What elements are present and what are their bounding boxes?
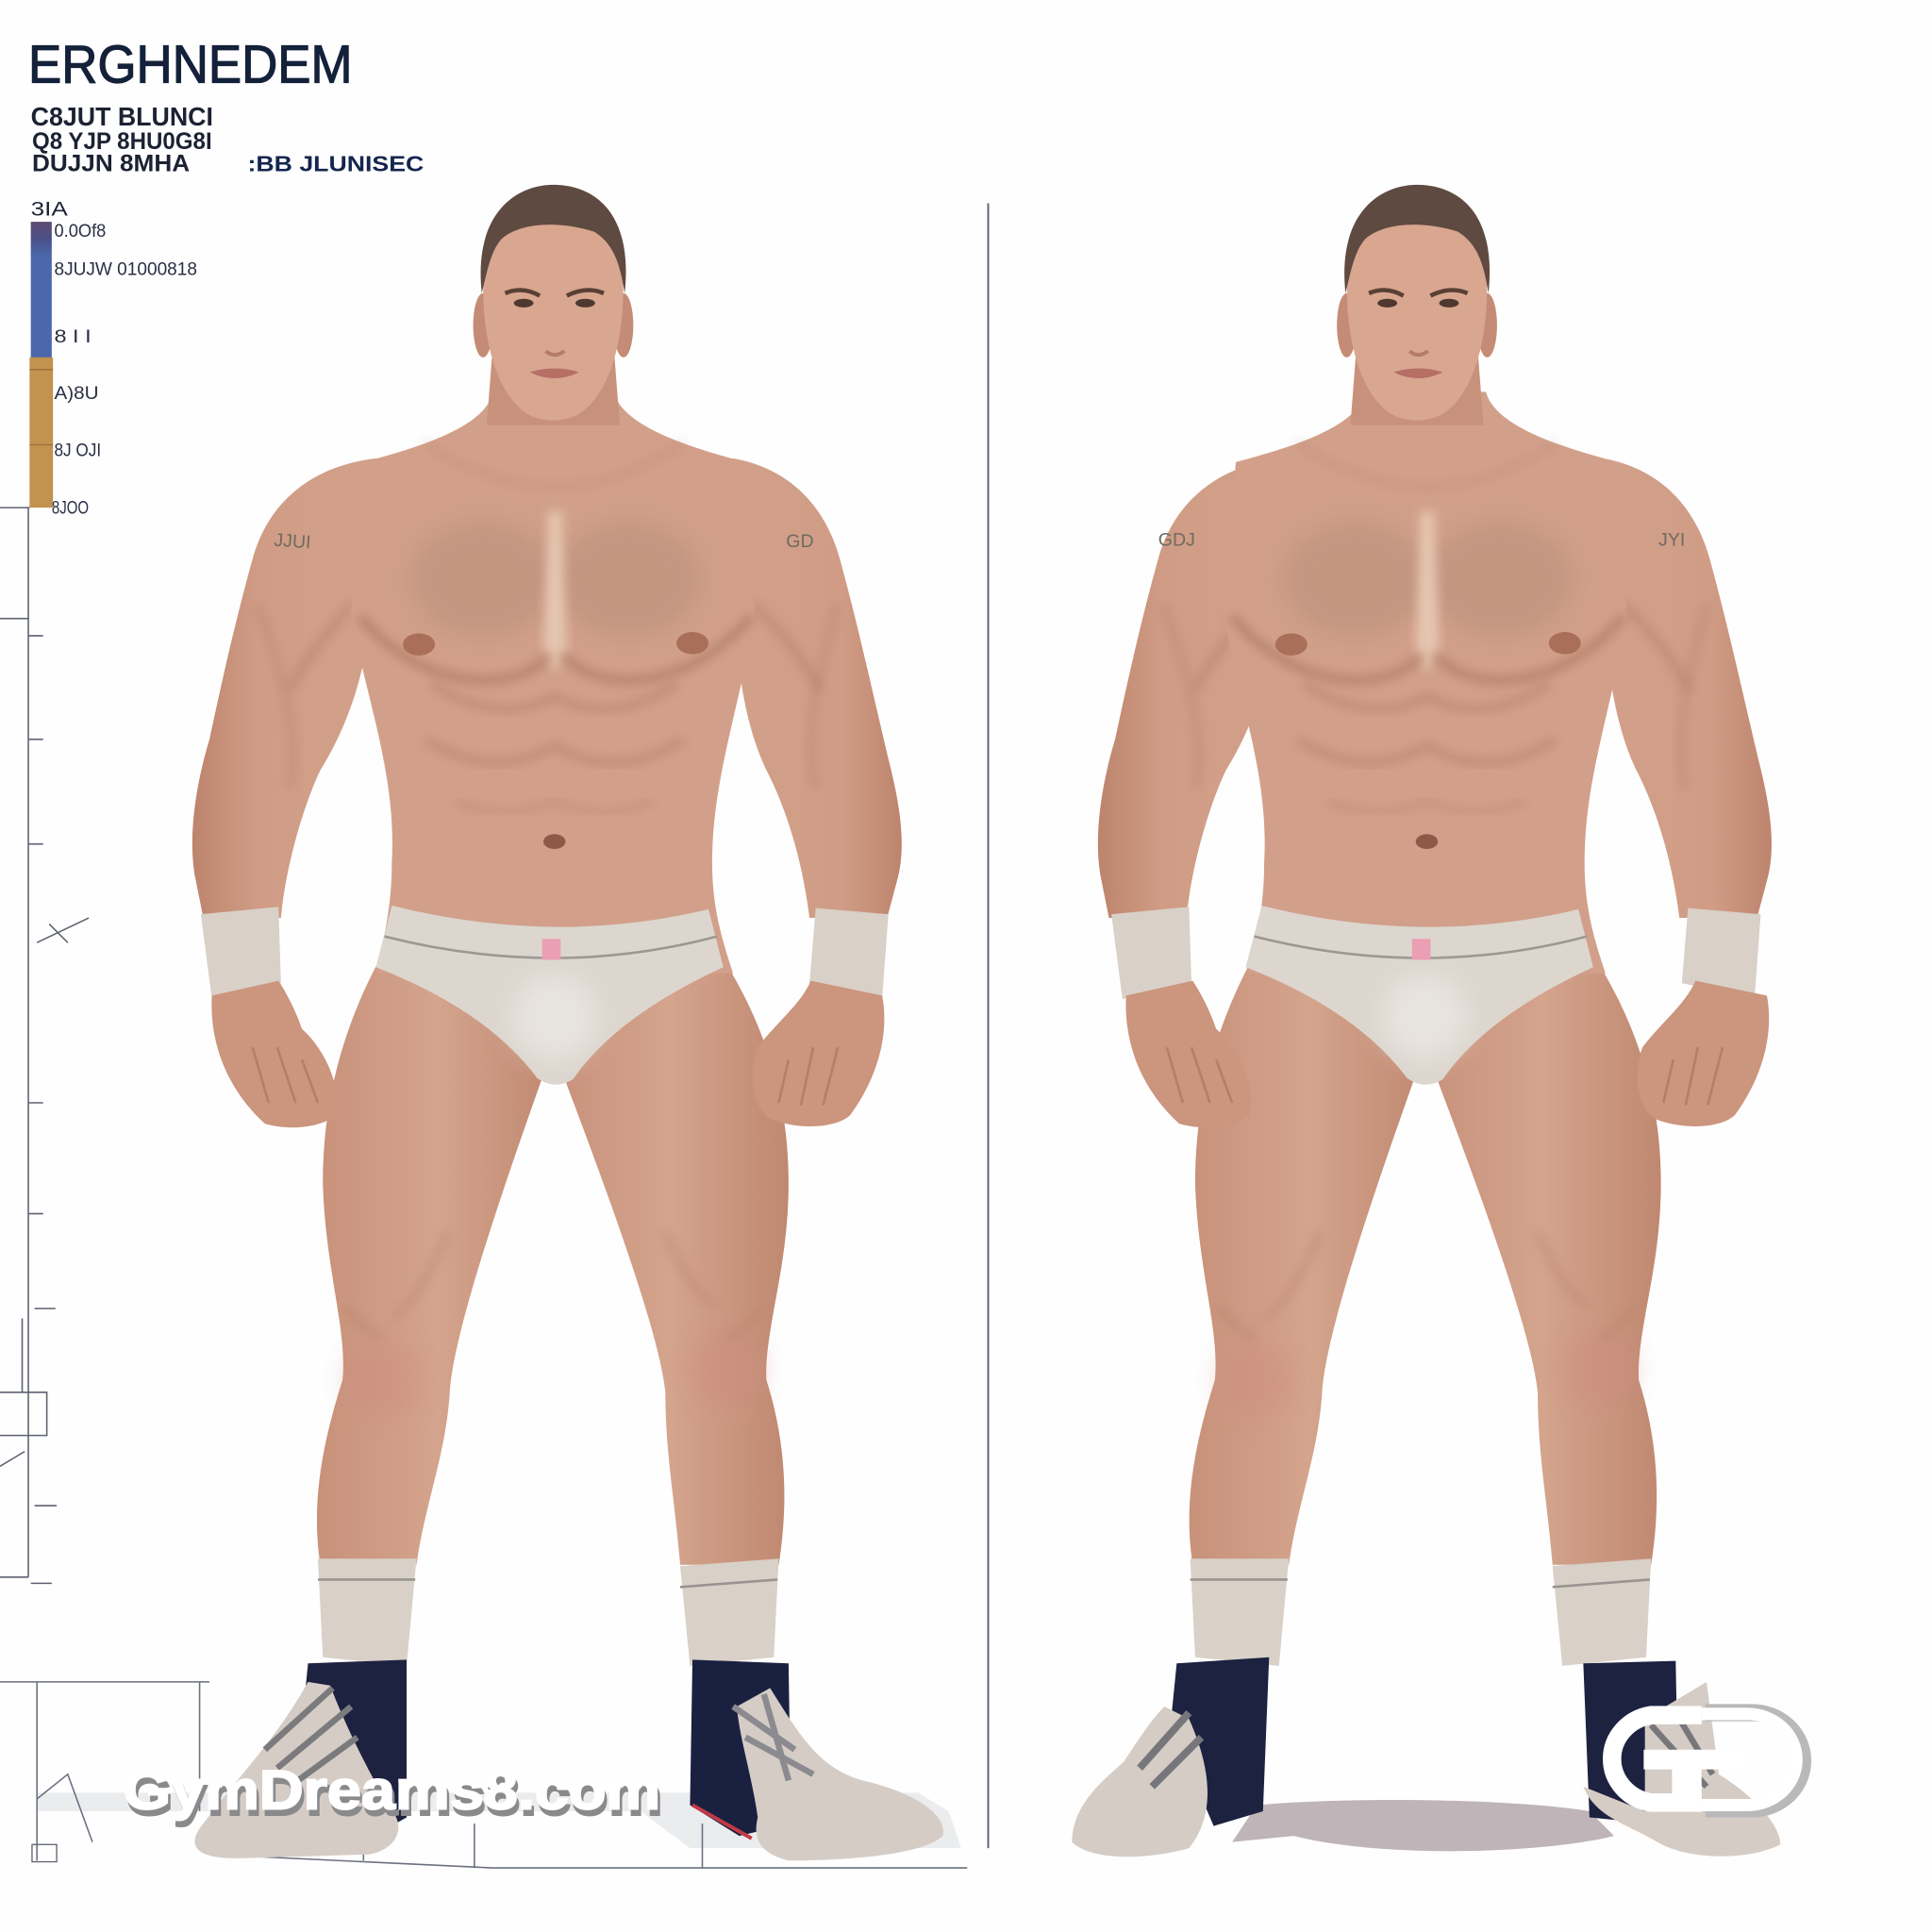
tattoos: GD [786, 531, 814, 552]
colour scale legend: 8JUJW 01000818 [54, 258, 197, 279]
watermark: GymDreams8.com [124, 1759, 660, 1821]
hand right [753, 981, 884, 1126]
legs [317, 955, 789, 1565]
boot right [1583, 1661, 1780, 1857]
divider line [988, 204, 990, 1848]
head [474, 185, 633, 425]
torso [1224, 391, 1626, 974]
colour scale legend: 0.0Of8 [54, 221, 106, 242]
figure right: front view [1072, 185, 1780, 1857]
colour scale legend: 3IA [31, 199, 68, 221]
subtitle text block [31, 102, 424, 177]
shorts [1245, 906, 1593, 1085]
left measurement axis [0, 508, 89, 1583]
ground shadow [1232, 1800, 1614, 1851]
wrist band right [809, 908, 889, 998]
foot measurement diagram and platform [0, 1682, 967, 1868]
wrist band left [201, 907, 281, 999]
hand left [211, 981, 337, 1127]
arm right [1603, 458, 1772, 918]
hand right [1637, 981, 1769, 1126]
tattoos: JJUI [274, 530, 311, 553]
subtitle text block: DUJJN 8MHA [32, 152, 190, 177]
subtitle text block: :BB JLUNISEC [248, 152, 424, 176]
tattoos: JYI [1658, 530, 1685, 551]
arm right [733, 458, 902, 918]
watermark: GymDreams8.com [125, 1766, 663, 1827]
boot right [690, 1659, 943, 1860]
colour scale legend: A)8U [54, 383, 98, 404]
socks [318, 1558, 778, 1666]
tattoos: GDJ [1158, 530, 1195, 551]
subtitle text block: C8JUT BLUNCI [31, 102, 213, 131]
hand left [1125, 981, 1251, 1127]
tattoos [1158, 530, 1685, 551]
colour scale legend: 8J OJI [54, 440, 101, 460]
tattoos [274, 530, 814, 553]
arm left [192, 458, 375, 918]
legs [1190, 955, 1661, 1565]
torso [351, 391, 754, 974]
socks [1191, 1558, 1651, 1666]
head [1337, 185, 1497, 425]
wrist band left [1111, 907, 1191, 999]
boot left [194, 1659, 407, 1858]
colour scale legend: 8JOO [52, 498, 89, 519]
shorts [375, 906, 724, 1085]
title: ERGHNEDEM [28, 35, 353, 94]
colour scale legend [29, 199, 197, 519]
arm left [1098, 458, 1281, 918]
subtitle text block: Q8 YJP 8HU0G8I [32, 129, 212, 155]
boot left [1072, 1657, 1269, 1857]
colour scale legend: 8 I I [54, 326, 92, 347]
logo: GD monogram [1612, 1713, 1803, 1808]
wrist band right [1682, 908, 1760, 998]
figure left: front view [192, 185, 943, 1860]
